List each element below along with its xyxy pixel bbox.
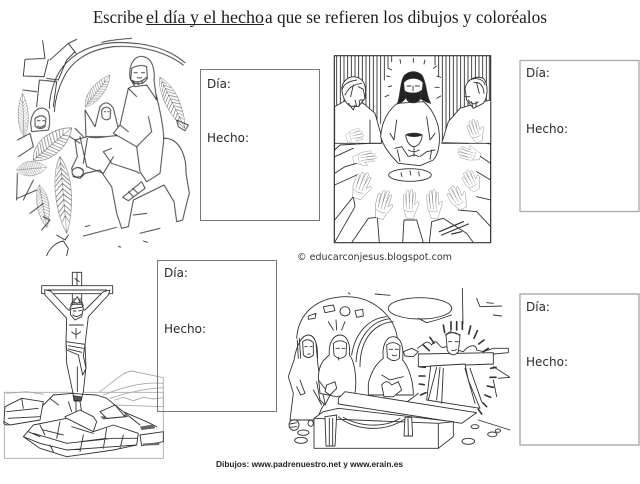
answer box 4: Hecho: (526, 355, 568, 369)
drawing: resurrection (288, 288, 510, 448)
background stripes (337, 56, 489, 140)
grey landscape (4, 371, 163, 458)
answer box 2 (520, 60, 639, 212)
woman right (368, 337, 413, 397)
copyright credit: © educarconjesus.blogspot.com (297, 252, 452, 263)
drawing credit: Dibujos: www.padrenuestro.net y www.erain.es (216, 460, 404, 469)
donkey (70, 128, 189, 228)
answer box 3: Hecho: (164, 322, 206, 336)
angel (405, 322, 508, 414)
answer box 3: Día: (164, 266, 188, 280)
Jesus (381, 72, 439, 166)
apostle left (335, 77, 382, 150)
bystander left (31, 108, 50, 132)
woman left (288, 335, 325, 420)
arms (335, 148, 491, 243)
foot stake and rocks (4, 393, 163, 457)
apostle right (442, 77, 491, 144)
signature (439, 222, 468, 235)
leaf cluster: left (16, 93, 78, 234)
answer box 2: Hecho: (526, 122, 568, 136)
tomb arch (297, 288, 510, 408)
pebbles (289, 420, 510, 444)
chalice (406, 133, 422, 147)
answer box 2: Día: (526, 66, 550, 80)
answer box 4 (520, 294, 639, 445)
woman middle (317, 335, 356, 405)
title: el día y el hecho (146, 7, 264, 27)
drawing: last supper (334, 56, 491, 243)
figure of Christ (45, 290, 110, 401)
rays (419, 322, 496, 414)
answer box 4: Día: (526, 300, 550, 314)
bread (389, 169, 431, 181)
table edge (335, 143, 491, 144)
drawing: entry into Jerusalem (16, 38, 191, 236)
cross (42, 272, 113, 312)
tomb box and cloth (314, 408, 453, 448)
hands (349, 143, 485, 221)
Jesus (103, 56, 164, 201)
answer box 1 (200, 70, 320, 220)
stray marks (47, 235, 147, 256)
halo (385, 58, 441, 98)
answer box 3 (158, 260, 276, 412)
answer box 1: Hecho: (207, 131, 249, 145)
stone slab (338, 392, 477, 423)
palm top (80, 71, 115, 110)
drawing: crucifixion (4, 235, 163, 458)
bystander centre (85, 103, 118, 137)
ground (42, 213, 160, 236)
title: a que se refieren los dibujos y coloréalos (265, 7, 547, 27)
palm right (154, 74, 191, 131)
title (93, 7, 547, 27)
answer box 1: Día: (207, 77, 231, 91)
title: Escribe (93, 7, 143, 27)
